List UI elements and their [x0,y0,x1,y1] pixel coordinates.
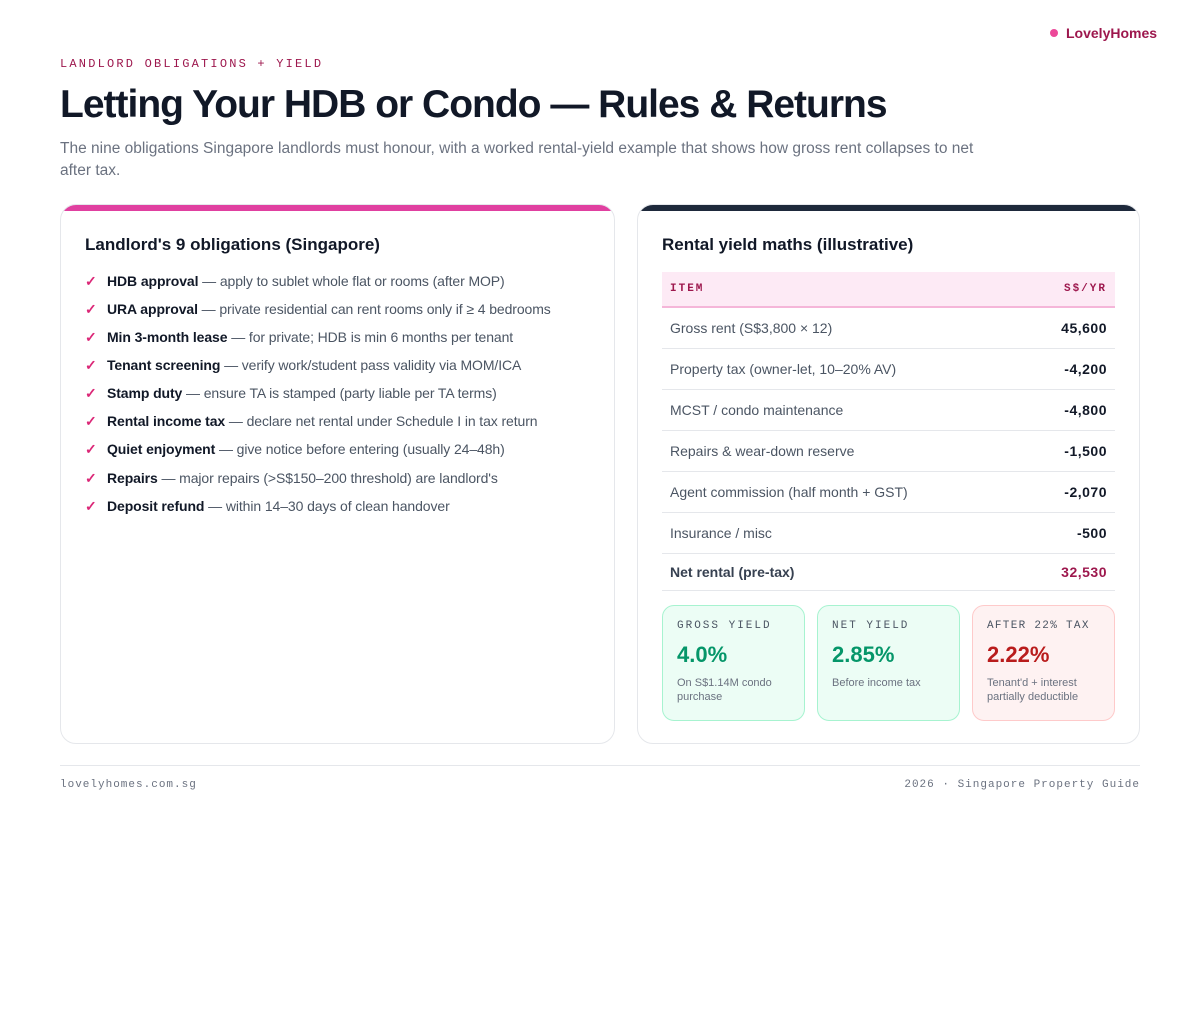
obligation list [85,273,551,514]
obligation list: ✓ [85,498,97,514]
stat: gross yield [662,605,805,721]
yield table: -2,070 [1064,484,1107,500]
obligation list: URA approval — private residential can rent rooms only if ≥ 4 bedrooms [107,301,551,317]
stat: after tax [972,605,1115,721]
obligation list: Min 3-month lease — for private; HDB is min 6 months per tenant [107,329,513,345]
obligation list: Stamp duty — ensure TA is stamped (party liable per TA terms) [107,385,497,401]
obligation list: ✓ [85,329,97,345]
obligation list: ✓ [85,441,97,457]
yield table: Property tax (owner-let, 10–20% AV) [670,361,896,377]
yield table: 45,600 [1061,320,1107,336]
obligation list: Deposit refund — within 14–30 days of clean handover [107,498,450,514]
yield table: MCST / condo maintenance [670,402,843,418]
yield table: -500 [1077,525,1107,541]
stat: gross yield: GROSS YIELD [677,620,772,632]
obligation list: Rental income tax — declare net rental under Schedule I in tax return [107,413,537,429]
panel heading: Rental yield maths (illustrative) [662,235,913,254]
obligation list: ✓ [85,385,97,401]
yield table: Agent commission (half month + GST) [670,484,908,500]
yield table: -4,800 [1064,402,1107,418]
stat: gross yield: On S$1.14M condo purchase [677,677,772,703]
yield table: Gross rent (S$3,800 × 12) [670,320,832,336]
obligation list: ✓ [85,413,97,429]
eyebrow: LANDLORD OBLIGATIONS + YIELD [60,57,323,71]
obligation list: Repairs — major repairs (>S$150–200 threshold) are landlord's [107,470,498,486]
yield table: Net rental (pre-tax) [670,564,794,580]
yield table: S$/YR [1064,283,1107,295]
obligation list: Tenant screening — verify work/student pass validity via MOM/ICA [107,357,521,373]
footer left: lovelyhomes.com.sg [60,779,197,791]
stat: after tax: Tenant'd + interest partially deductible [987,677,1078,703]
stat: net yield: NET YIELD [832,620,909,632]
panel: obligations [60,204,615,744]
yield table: ITEM [670,283,704,295]
stat: net yield: 2.85% [832,642,894,667]
yield table [662,272,1115,591]
stat: net yield: Before income tax [832,677,921,689]
panel heading: Landlord's 9 obligations (Singapore) [85,235,380,254]
stat: net yield [817,605,960,721]
subtitle: The nine obligations Singapore landlords must honour, with a worked rental-yield example that shows how gross rent collapses to net after tax. [60,140,973,179]
footer right: 2026 · Singapore Property Guide [904,779,1140,791]
brand logo: LovelyHomes [1066,25,1157,41]
panel: rental yield [637,204,1140,744]
obligation list: HDB approval — apply to sublet whole flat or rooms (after MOP) [107,273,505,289]
yield table: -4,200 [1064,361,1107,377]
obligation list: ✓ [85,470,97,486]
stat: after tax: AFTER 22% TAX [987,620,1090,632]
title: Letting Your HDB or Condo — Rules & Returns [60,83,887,126]
stat: gross yield: 4.0% [677,642,727,667]
obligation list: ✓ [85,301,97,317]
stat: after tax: 2.22% [987,642,1049,667]
yield table: -1,500 [1064,443,1107,459]
obligation list: ✓ [85,273,97,289]
obligation list: Quiet enjoyment — give notice before entering (usually 24–48h) [107,441,505,457]
yield table: Insurance / misc [670,525,772,541]
obligation list: ✓ [85,357,97,373]
yield table: Repairs & wear-down reserve [670,443,854,459]
yield table: 32,530 [1061,564,1107,580]
